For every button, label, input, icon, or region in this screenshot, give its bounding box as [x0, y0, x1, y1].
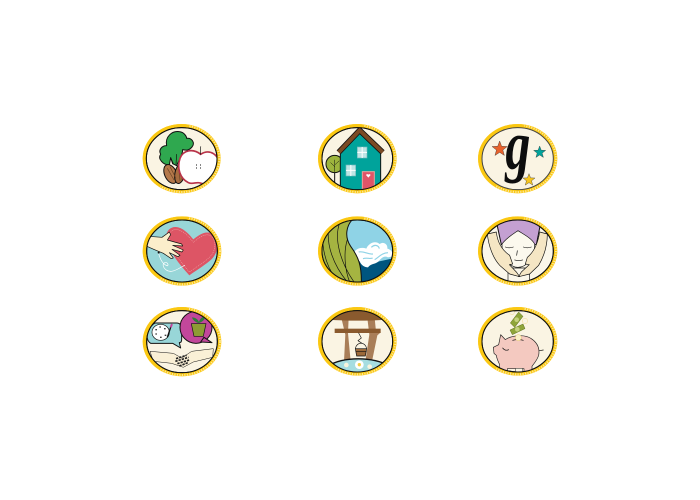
- icon: coins: [510, 310, 528, 324]
- icon: posts: [341, 318, 380, 361]
- badge: hand on heart: [143, 216, 221, 286]
- badge: letter g with stars: [478, 107, 557, 193]
- icon: foot patch: [515, 368, 523, 372]
- icon: banknotes: [510, 312, 525, 335]
- icon: magenta speech bubble: [180, 311, 212, 343]
- badge: leaf and water: [318, 216, 397, 286]
- icon: orange star: [492, 141, 507, 155]
- icon: hand: [143, 232, 183, 259]
- badge: face massage: [478, 216, 557, 286]
- icon: beam: [335, 329, 381, 333]
- icon: house: [339, 130, 383, 191]
- icon: broccoli: [160, 131, 193, 166]
- icon: waves: [353, 242, 393, 267]
- badge: house: [318, 124, 397, 193]
- dark water: [359, 258, 391, 282]
- badge: well and water: [318, 307, 397, 378]
- icon: handshake: [150, 349, 213, 367]
- badge: food (broccoli, almonds, apple): [143, 124, 221, 193]
- icon: apple: [179, 147, 219, 184]
- icon: yellow star: [523, 174, 535, 185]
- icon: pond: [332, 358, 382, 372]
- icon: face: [502, 231, 535, 267]
- icon: flowers: [344, 360, 372, 369]
- icon: teal speech bubble: [147, 323, 182, 348]
- icon: heart: [166, 227, 218, 275]
- badge: exchange speech bubbles and handshake: [143, 307, 221, 376]
- icon: towel: [496, 220, 540, 246]
- icon: tree: [326, 154, 340, 182]
- icon: right hand: [519, 232, 547, 277]
- icon: almonds: [163, 164, 184, 184]
- icon: neck: [508, 268, 530, 284]
- icon: teal star: [534, 146, 546, 157]
- icon: coin above slot: [515, 335, 521, 341]
- icon: leaf: [322, 220, 362, 282]
- badge: piggy bank: [478, 307, 557, 376]
- white string: [158, 253, 185, 271]
- icon: bucket: [355, 333, 367, 356]
- icon: left hand: [487, 232, 520, 277]
- icon: pig: [493, 335, 539, 373]
- icon: roof: [332, 311, 382, 321]
- letter g: g: [504, 107, 530, 184]
